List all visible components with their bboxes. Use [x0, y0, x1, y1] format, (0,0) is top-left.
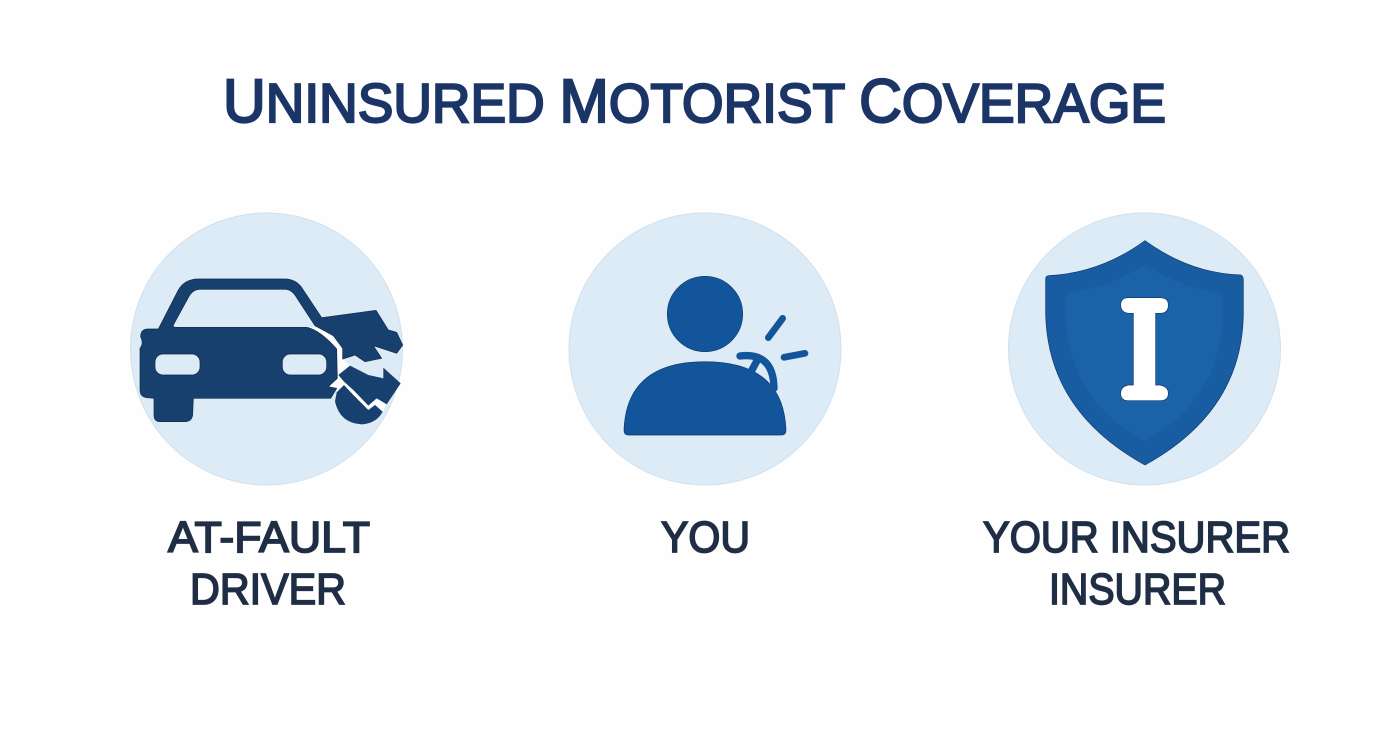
icon background: car circle [130, 213, 402, 485]
icon background: person circle [569, 213, 841, 485]
label: at-fault driver: AT-FAULT [168, 513, 370, 562]
label: at-fault driver: DRIVER [190, 565, 346, 614]
icon background: shield circle [1008, 213, 1280, 485]
label: your insurer: INSURER [1049, 565, 1226, 614]
icon: person with seatbelt [624, 276, 805, 435]
label: at-fault driver [168, 513, 370, 614]
icon: shield with letter I [1046, 241, 1243, 465]
label: you: YOU [661, 513, 750, 562]
panel: your insurer [983, 213, 1290, 614]
title: UNINSURED MOTORIST COVERAGE [223, 67, 1166, 135]
panel: at-fault driver [130, 213, 403, 614]
panel: you [569, 213, 841, 562]
label: your insurer: YOUR INSURER [983, 513, 1290, 562]
label: your insurer [983, 513, 1290, 614]
icon: crashed car [140, 279, 403, 424]
